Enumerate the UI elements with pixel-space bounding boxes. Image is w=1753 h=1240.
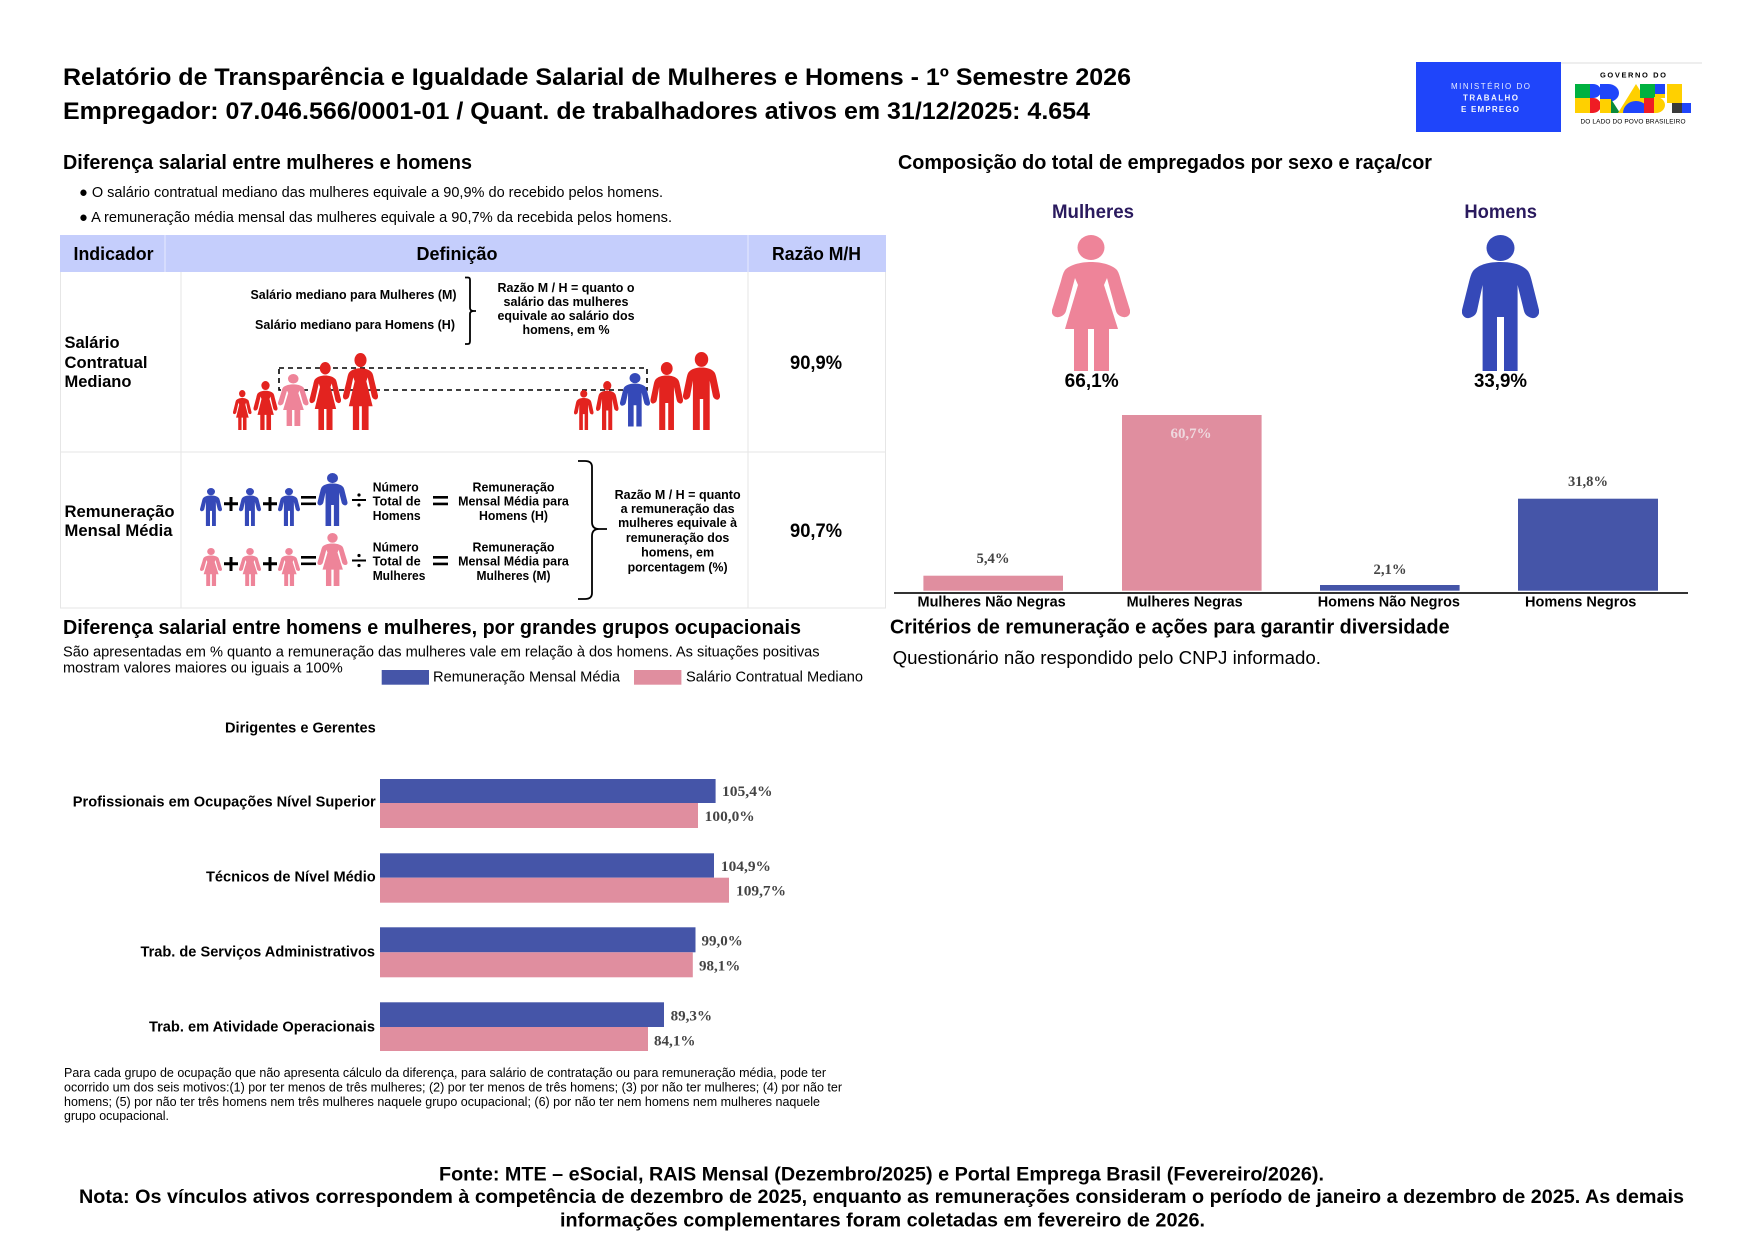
dashed median box (279, 368, 647, 390)
ratio explanation: homens, em (641, 546, 714, 560)
panel: men share: Homens (1464, 201, 1537, 223)
median labels (250, 288, 456, 332)
logo: ministério e governo (1416, 62, 1702, 132)
bar chart: composição por raça/cor: Mulheres Negras (1127, 595, 1243, 611)
bars: técnicos: 109,7% (736, 884, 786, 900)
footnote: grupo ocupacional. (64, 1109, 169, 1123)
bars: serviços administrativos: 98,1% (699, 959, 740, 975)
value: salário contratual: 90,9% (790, 353, 842, 374)
formula: women: Remuneração (472, 541, 555, 555)
bullet points (79, 184, 672, 226)
panel: women share: 66,1% (1065, 371, 1119, 392)
logo: ministério e governo: DO LADO DO POVO BRASILEIRO (1580, 118, 1686, 125)
table header: Definição (416, 244, 498, 264)
ratio explanation: Razão M / H = quanto (615, 488, 741, 502)
footnote: Para cada grupo de ocupação que não apresenta cálculo da diferença, para salário de contratação ou para remuneração média, pode ter (64, 1066, 826, 1080)
bars: profissionais: 100,0% (705, 809, 755, 825)
ratio explanation (615, 488, 741, 575)
category labels: Profissionais em Ocupações Nível Superior (73, 795, 376, 811)
legend: Salário Contratual Mediano (686, 669, 863, 686)
bar chart: composição por raça/cor (894, 415, 1688, 611)
indicator label: Salário (64, 334, 120, 352)
indicator label (64, 503, 174, 540)
ratio explanation: porcentagem (%) (628, 561, 728, 575)
bar chart: grupos ocupacionais (73, 721, 786, 1051)
bars: profissionais: 105,4% (722, 784, 772, 800)
formula: men: Número (373, 481, 419, 495)
table: diferença salarial (60, 235, 886, 608)
bars: atividade operacionais: 89,3% (671, 1009, 712, 1025)
logo: ministério e governo: TRABALHO (1463, 94, 1518, 103)
bar chart: composição por raça/cor: 60,7% (1170, 426, 1212, 442)
bars: técnicos: 104,9% (721, 859, 771, 875)
ratio explanation: remuneração dos (626, 531, 729, 545)
footer: fonte e nota: Fonte: MTE – eSocial, RAIS Mensal (Dezembro/2025) e Portal Emprega Brasil (Fevereiro/2026). (439, 1164, 1324, 1186)
title: Empregador: 07.046.566/0001-01 / Quant. de trabalhadores ativos em 31/12/2025: 4.654 (63, 98, 1090, 125)
footnote: ocorrido um dos seis motivos:(1) por ter menos de três mulheres; (2) por ter menos de três homens; (3) por não ter mulheres; (4) por não ter (64, 1081, 842, 1095)
table header: Razão M/H (772, 244, 861, 264)
pictogram: men ordered by salary (574, 352, 720, 430)
ratio explanation (498, 281, 635, 337)
title: Relatório de Transparência e Igualdade Salarial de Mulheres e Homens - 1º Semestre 2026 (63, 64, 1131, 91)
bar chart: composição por raça/cor: Mulheres Não Negras (918, 595, 1066, 611)
formula: women: Número (373, 541, 419, 555)
category labels: Dirigentes e Gerentes (225, 721, 376, 737)
panel: women share (1052, 201, 1134, 392)
title (63, 64, 1131, 125)
bar chart: composição por raça/cor: Homens Negros (1525, 595, 1636, 611)
bar chart: composição por raça/cor: 2,1% (1374, 562, 1406, 578)
bullet points: ● A remuneração média mensal das mulheres equivale a 90,7% da recebida pelos homens. (79, 209, 672, 226)
bars: atividade operacionais: 84,1% (654, 1034, 695, 1050)
row: salário contratual mediano (64, 278, 842, 430)
ratio explanation: equivale ao salário dos (498, 309, 635, 323)
value: remuneração mensal: 90,7% (790, 521, 842, 542)
large brace (578, 461, 607, 599)
indicator label (64, 334, 148, 391)
formula: women: Mulheres (373, 569, 425, 583)
icon: woman (1052, 235, 1130, 371)
bars: serviços administrativos: 99,0% (702, 934, 743, 950)
icon: man (1462, 235, 1539, 371)
table header: Indicador (74, 244, 154, 264)
legend: Remuneração Mensal Média (433, 669, 621, 686)
bars: serviços administrativos (380, 927, 743, 977)
indicator label: Remuneração (64, 503, 174, 521)
bars: profissionais (380, 779, 772, 828)
description: mostram valores maiores ou iguais a 100% (63, 661, 343, 677)
text: questionário: Questionário não respondido pelo CNPJ informado. (893, 648, 1321, 668)
description: São apresentadas em % quanto a remuneração das mulheres vale em relação à dos homens. As situações positivas (63, 645, 820, 661)
category labels: Técnicos de Nível Médio (206, 870, 376, 886)
ratio explanation: Razão M / H = quanto o (498, 281, 635, 295)
ratio explanation: homens, em % (522, 323, 610, 337)
panel: women share: Mulheres (1052, 201, 1134, 223)
formula: women: Mulheres (M) (476, 569, 550, 583)
median labels: Salário mediano para Mulheres (M) (250, 288, 456, 302)
logo: ministério e governo: E EMPREGO (1461, 105, 1519, 114)
footer: fonte e nota: informações complementares foram coletadas em fevereiro de 2026. (560, 1210, 1205, 1232)
median labels: Salário mediano para Homens (H) (255, 318, 455, 332)
category labels (73, 721, 376, 1036)
legend (382, 669, 863, 686)
bar chart: composição por raça/cor: Homens Não Negros (1318, 595, 1460, 611)
panel: men share: 33,9% (1474, 371, 1527, 392)
description (63, 645, 820, 677)
formula: men: Homens (H) (479, 509, 548, 523)
formula: men: Remuneração (472, 481, 555, 495)
indicator label: Mensal Média (64, 522, 173, 540)
category labels: Trab. em Atividade Operacionais (149, 1020, 375, 1036)
formula: men: Mensal Média para (458, 495, 570, 509)
ratio explanation: a remuneração das (621, 502, 735, 516)
brace (465, 278, 476, 344)
heading: diferença salarial: Diferença salarial entre mulheres e homens (63, 152, 472, 174)
formula: men: Total de (373, 495, 421, 509)
ratio explanation: mulheres equivale à (618, 516, 737, 530)
formula: women: Mensal Média para (458, 555, 570, 569)
formula: men: Homens (373, 509, 421, 523)
footer: fonte e nota: Nota: Os vínculos ativos correspondem à competência de dezembro de 2025, enquanto as remunerações consideram o período de janeiro a dezembro de 2025. As demais (79, 1186, 1684, 1208)
indicator label: Contratual (64, 354, 148, 372)
bar chart: composição por raça/cor: 31,8% (1568, 474, 1608, 490)
row: remuneração mensal média (64, 461, 842, 599)
footnote (64, 1066, 842, 1123)
heading: composição: Composição do total de empregados por sexo e raça/cor (898, 152, 1432, 174)
indicator label: Mediano (64, 373, 131, 391)
pictogram: women ordered by salary (233, 353, 378, 430)
heading: diferença por grupos ocupacionais: Diferença salarial entre homens e mulheres, por grandes grupos ocupacionais (63, 617, 801, 639)
bar chart: composição por raça/cor: 5,4% (976, 551, 1010, 567)
panel: men share (1462, 201, 1539, 392)
formula: men (200, 473, 570, 526)
ratio explanation: salário das mulheres (504, 295, 629, 309)
logo: ministério e governo: GOVERNO DO (1600, 70, 1666, 79)
footnote: homens; (5) por não ter três homens nem três mulheres naquele grupo ocupacional; (6) por não ter nem homens nem mulheres naquele (64, 1095, 820, 1109)
formula: women: Total de (373, 555, 421, 569)
bars: atividade operacionais (380, 1002, 712, 1051)
formula: women (200, 533, 570, 586)
table header (60, 235, 886, 272)
bullet points: ● O salário contratual mediano das mulheres equivale a 90,9% do recebido pelos homens. (79, 184, 663, 201)
footer: fonte e nota (79, 1164, 1684, 1232)
heading: critérios de remuneração: Critérios de remuneração e ações para garantir diversidade (890, 616, 1450, 638)
bars: técnicos (380, 853, 786, 903)
category labels: Trab. de Serviços Administrativos (140, 945, 375, 961)
logo: ministério e governo: MINISTÉRIO DO (1451, 82, 1530, 91)
